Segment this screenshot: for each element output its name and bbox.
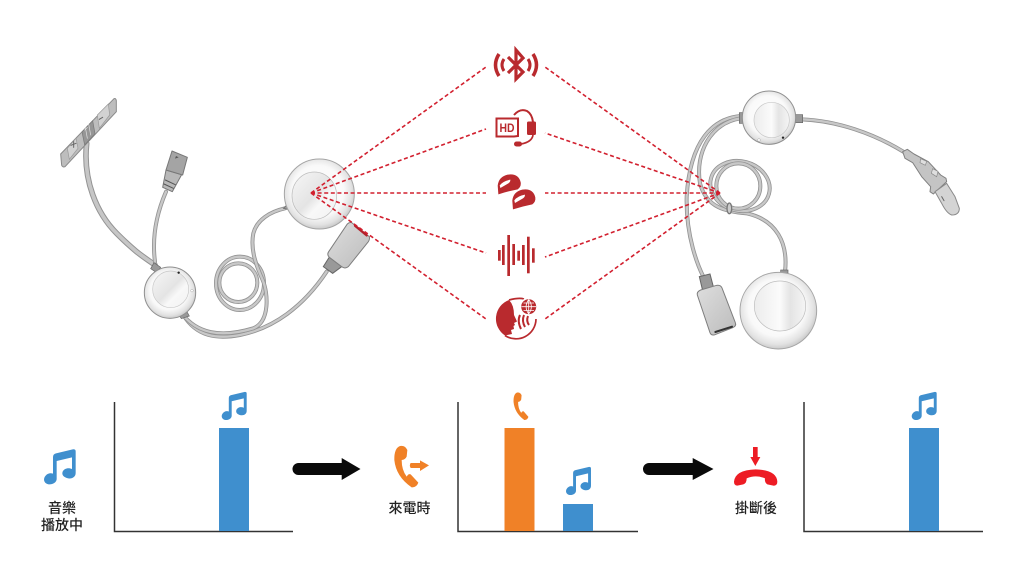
small connector plug	[163, 151, 187, 192]
icon: incoming phone	[394, 446, 429, 487]
USB plug	[697, 274, 736, 335]
bar: music	[909, 428, 939, 531]
small control disc	[144, 263, 196, 319]
icon: HD headset	[496, 110, 536, 146]
dashed connector lines	[311, 67, 720, 319]
speaker disc	[283, 159, 354, 229]
left headset kit illustration	[61, 99, 370, 337]
chart: music restored	[804, 392, 983, 532]
cables	[86, 143, 327, 337]
label: after hanging up: 掛斷後	[735, 500, 777, 516]
icon: two helmets	[498, 174, 535, 209]
right headset kit illustration	[687, 91, 959, 349]
icon: sound wave	[498, 235, 535, 276]
label: music playing: 播放中	[41, 517, 83, 533]
panel: after hanging up	[734, 447, 777, 516]
chart: music only	[114, 392, 293, 532]
icon: music note	[222, 392, 247, 420]
icon: hang up phone	[734, 447, 777, 486]
arrow	[643, 458, 714, 480]
icon: phone	[514, 392, 528, 420]
chart: call with lowered music	[458, 392, 638, 532]
helmet one	[498, 174, 521, 194]
label: music playing: 音樂	[48, 500, 76, 516]
icon: bluetooth	[496, 50, 536, 79]
cables	[687, 116, 903, 277]
icon: music note	[44, 449, 76, 484]
USB plug with red slot	[323, 222, 370, 273]
bar: call	[504, 428, 534, 531]
panel: incoming call	[388, 446, 430, 516]
boom microphone controller	[903, 149, 959, 215]
control tape with plus and minus	[61, 99, 116, 167]
label: incoming call: 來電時	[388, 500, 430, 516]
icon: music note	[566, 467, 591, 495]
icon: music note	[912, 392, 937, 420]
bar: music	[563, 504, 593, 531]
icon: voice and globe	[496, 298, 538, 339]
panel: music playing	[41, 449, 83, 533]
helmet two	[512, 189, 535, 209]
large speaker disc	[740, 270, 817, 349]
arrow	[292, 458, 360, 480]
bar: music	[219, 428, 249, 531]
inline control disc	[739, 91, 803, 144]
icon: HD headset: HD	[500, 121, 515, 135]
